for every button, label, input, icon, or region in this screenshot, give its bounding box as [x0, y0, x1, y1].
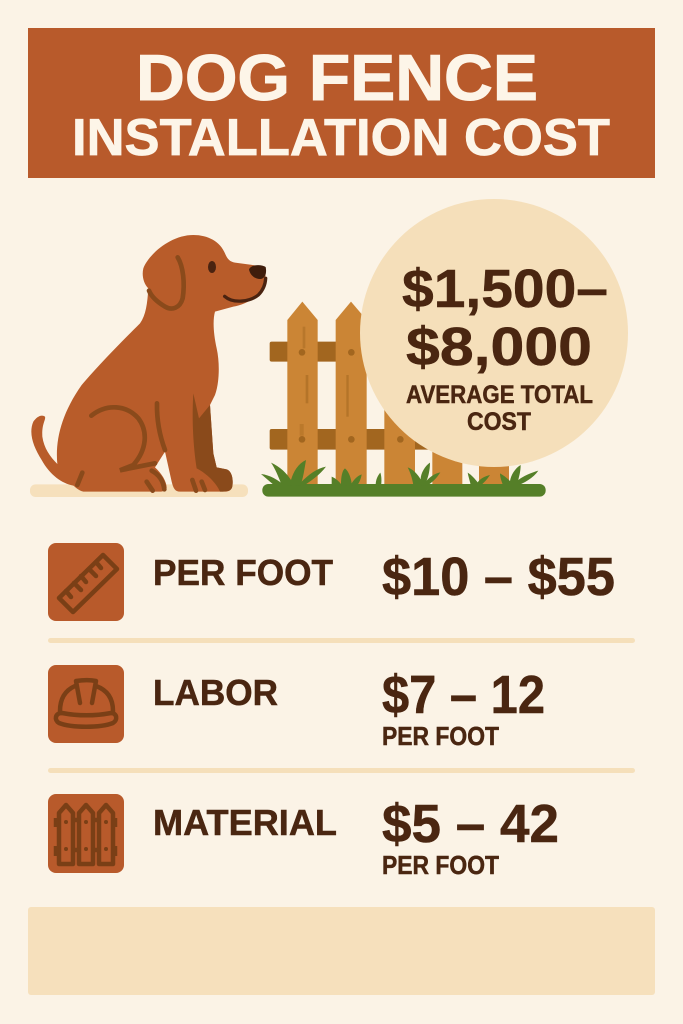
title banner: DOG FENCE [136, 41, 538, 114]
label: material: MATERIAL [153, 802, 337, 843]
title banner [28, 28, 655, 178]
icon: fence [48, 794, 124, 873]
grass [261, 460, 546, 497]
label: labor: LABOR [153, 672, 278, 713]
unit: material: PER FOOT [382, 850, 499, 880]
row: per foot [48, 543, 615, 621]
icon: wooden fence with grass [261, 302, 546, 497]
callout: average total cost: COST [467, 408, 531, 436]
callout: average total cost [360, 199, 628, 467]
dog eye [208, 261, 216, 273]
unit: labor: PER FOOT [382, 721, 499, 751]
row: material [48, 794, 559, 880]
dog nose [249, 265, 266, 279]
value: per foot: $10 – $55 [382, 547, 615, 607]
callout: average total cost: AVERAGE TOTAL [406, 381, 593, 409]
icon: hard hat [48, 665, 124, 743]
dog shaded front leg [193, 393, 233, 492]
title banner: INSTALLATION COST [72, 109, 610, 167]
dog mouth [225, 278, 266, 301]
footer panel [28, 907, 655, 995]
callout: average total cost: $8,000 [406, 317, 592, 377]
dog ear [149, 257, 184, 309]
row: labor [48, 665, 545, 751]
icon: ruler [48, 543, 124, 621]
label: per foot: PER FOOT [153, 552, 333, 593]
value: material: $5 – 42 [382, 794, 559, 854]
dog haunch lines [77, 403, 205, 491]
callout: average total cost: $1,500– [402, 259, 608, 319]
value: labor: $7 – 12 [382, 665, 545, 725]
icon: sitting dog [30, 235, 266, 497]
